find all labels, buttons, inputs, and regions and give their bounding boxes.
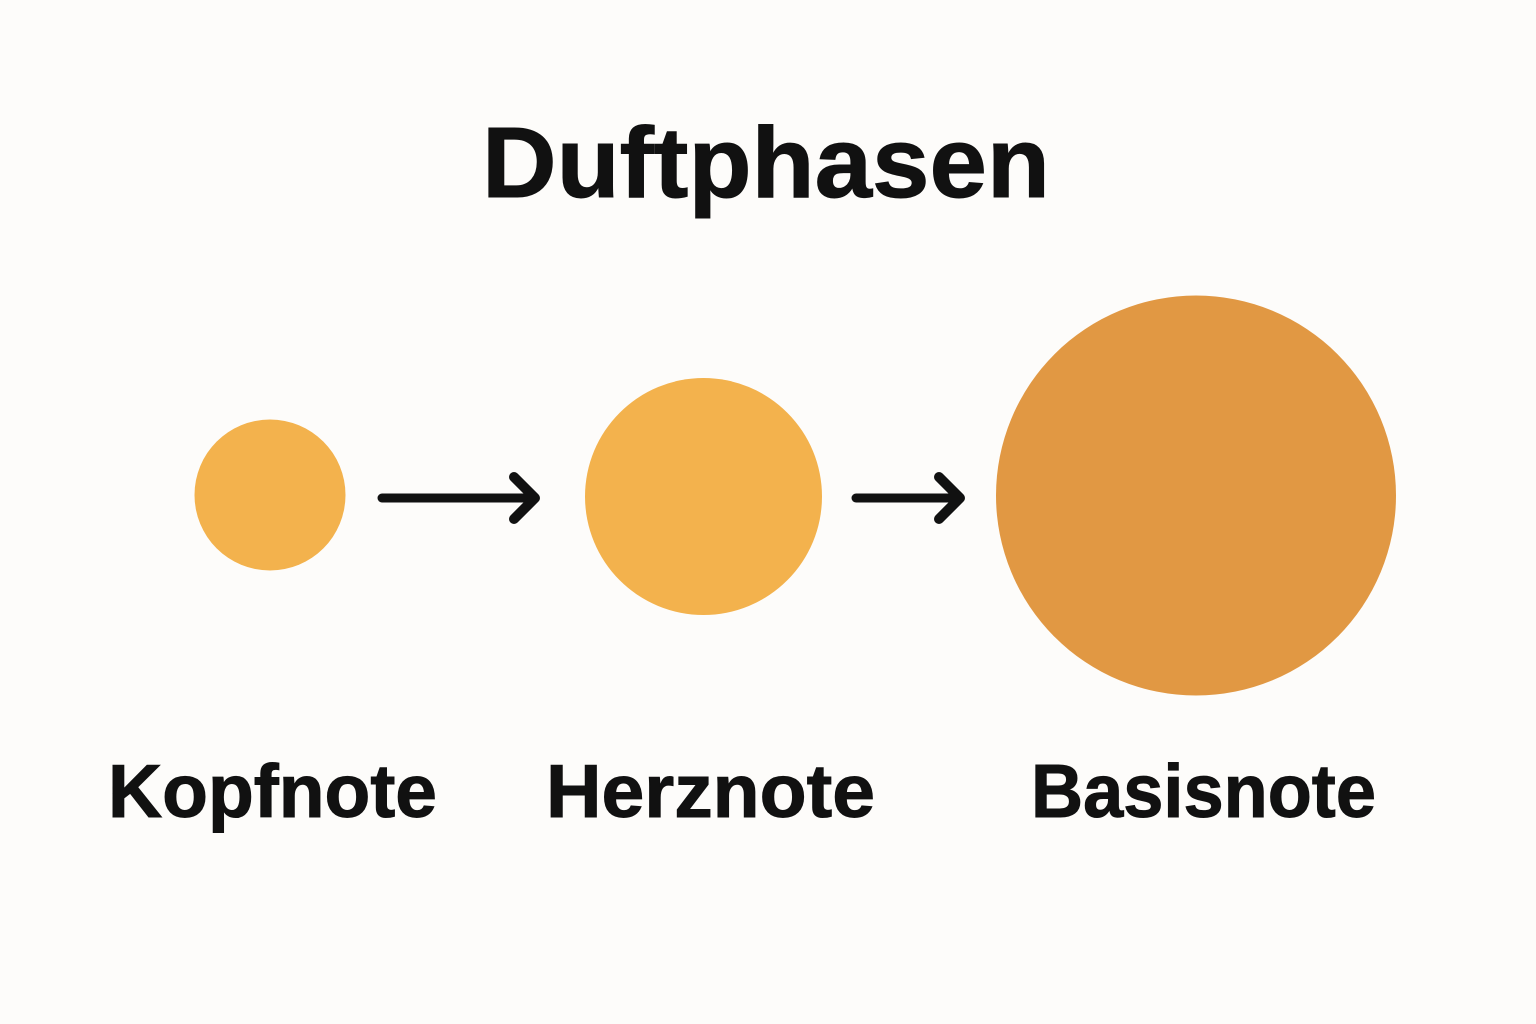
- label: Kopfnote: Kopfnote: [108, 749, 437, 833]
- circle: Herznote: [585, 378, 822, 615]
- label: Herznote: Herznote: [546, 749, 875, 833]
- circle: Basisnote: [996, 296, 1396, 696]
- label: Basisnote: Basisnote: [1031, 749, 1376, 833]
- title: Duftphasen: [482, 107, 1050, 219]
- circle: Kopfnote: [194, 420, 346, 570]
- arrow: Herznote to Basisnote: [856, 477, 960, 519]
- arrow: Kopfnote to Herznote: [382, 477, 535, 519]
